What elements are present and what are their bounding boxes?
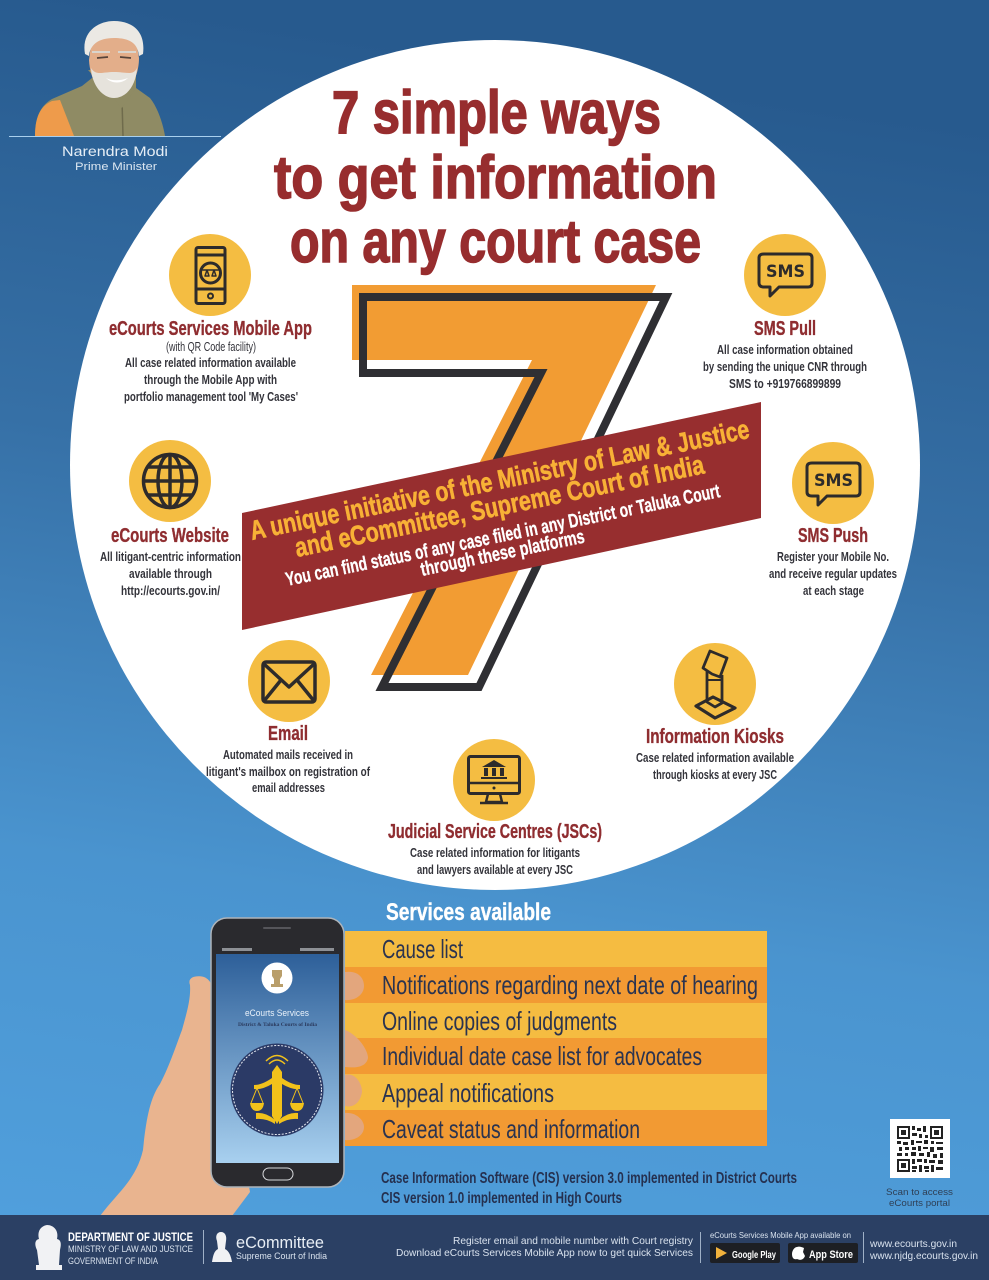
footer logo: Department of Justice: DEPARTMENT OF JUSTICE <box>68 1232 193 1244</box>
phone <box>211 918 344 1187</box>
footer message <box>396 1235 694 1259</box>
banner: through these platforms <box>419 526 587 581</box>
big numeral 7 <box>352 285 666 687</box>
panel: SMS Pull: SMS Pull <box>754 318 816 340</box>
icon: SMS bubble: SMS <box>814 471 853 491</box>
icon: Supreme Court emblem <box>212 1232 232 1262</box>
panel: eCourts Website: eCourts Website <box>111 525 229 547</box>
panel: eCourts Services Mobile App: through the Mobile App with <box>144 373 277 387</box>
phone: District & Taluka Courts of India <box>238 1022 317 1028</box>
banner: and eCommittee, Supreme Court of India <box>292 449 707 563</box>
panel: eCourts Services Mobile App: (with QR Code facility) <box>166 340 256 354</box>
panel: eCourts Website <box>100 440 241 598</box>
note: software versions: Case Information Software (CIS) version 3.0 implemented in District Courts <box>381 1170 797 1187</box>
title: 7 simple ways <box>332 79 661 146</box>
icon: kiosk <box>696 651 735 718</box>
footer URLs: www.njdg.ecourts.gov.in <box>869 1250 978 1262</box>
note: software versions <box>381 1170 797 1207</box>
panel: SMS Push: SMS Push <box>798 525 868 547</box>
panel: eCourts Services Mobile App <box>109 234 312 404</box>
panel: SMS Push: Register your Mobile No. <box>777 550 889 564</box>
title <box>274 79 717 275</box>
panel: Email <box>206 640 371 795</box>
icon: monitor with court building <box>468 756 520 803</box>
panel: SMS Pull: All case information obtained <box>717 343 853 357</box>
banner: A unique initiative of the Ministry of Law & Justice <box>247 414 752 546</box>
QR code <box>890 1119 950 1178</box>
panel: Information Kiosks <box>636 643 794 782</box>
panel: Email: Email <box>268 723 308 745</box>
portrait: Narendra Modi <box>35 21 165 136</box>
panel: SMS Pull <box>703 234 867 391</box>
panel: Judicial Service Centres: and lawyers available at every JSC <box>417 863 573 877</box>
badge: Google Play: Google Play <box>732 1250 776 1261</box>
footer band <box>0 1215 989 1280</box>
footer logo: Department of Justice: MINISTRY OF LAW AND JUSTICE <box>68 1244 193 1255</box>
services list <box>345 931 767 1146</box>
icon: SMS bubble: SMS <box>766 262 805 282</box>
portrait rule <box>9 136 221 137</box>
title: on any court case <box>290 208 701 275</box>
QR caption: eCourts portal <box>889 1198 950 1209</box>
panel: eCourts Services Mobile App: portfolio management tool 'My Cases' <box>124 390 298 404</box>
panel: Information Kiosks: through kiosks at every JSC <box>653 768 777 782</box>
panel: SMS Pull: by sending the unique CNR through <box>703 360 867 374</box>
panel: Email: Automated mails received in <box>223 748 353 762</box>
panel: Information Kiosks: Information Kiosks <box>646 726 784 748</box>
icon: SMS bubble <box>807 463 860 505</box>
icon: envelope <box>263 662 315 702</box>
footer message: Register email and mobile number with Court registry <box>453 1235 694 1247</box>
badge: App Store <box>788 1243 858 1263</box>
icon: globe <box>144 454 196 508</box>
panel: SMS Push: at each stage <box>803 584 864 598</box>
footer logo: eCommittee: eCommittee <box>236 1234 324 1252</box>
icon: national emblem <box>35 1225 62 1270</box>
phone: eCourts Services <box>245 1008 309 1018</box>
footer URLs: www.ecourts.gov.in <box>869 1238 957 1250</box>
panel: Email: litigant's mailbox on registration of <box>206 765 371 779</box>
footer logo: eCommittee <box>212 1232 328 1262</box>
footer logo: Department of Justice: GOVERNMENT OF INDIA <box>68 1256 159 1267</box>
QR caption: Scan to access <box>886 1187 953 1198</box>
name caption <box>62 144 168 173</box>
name caption: Prime Minister <box>75 161 157 173</box>
panel: Judicial Service Centres <box>388 739 602 877</box>
services list: Cause list <box>382 934 464 964</box>
services list: Online copies of judgments <box>382 1006 617 1036</box>
name caption: Narendra Modi <box>62 144 168 159</box>
banner: You can find status of any case filed in any District or Taluka Court <box>284 480 722 591</box>
note: software versions: CIS version 1.0 implemented in High Courts <box>381 1190 622 1207</box>
badge: Google Play <box>710 1243 780 1263</box>
heading: services available: Services available <box>386 899 551 926</box>
footer logo: Department of Justice <box>35 1225 193 1270</box>
services list: Notifications regarding next date of hearing <box>382 970 758 1000</box>
panel: eCourts Services Mobile App: eCourts Services Mobile App <box>109 318 312 340</box>
banner <box>242 402 761 630</box>
app emblem <box>230 1044 324 1136</box>
panel: Email: email addresses <box>252 781 325 795</box>
panel: eCourts Website: http://ecourts.gov.in/ <box>121 584 220 598</box>
hand holding phone <box>100 918 368 1216</box>
panel: Judicial Service Centres: Case related information for litigants <box>410 846 580 860</box>
panel: SMS Pull: SMS to +919766899899 <box>729 377 841 391</box>
footer message: Download eCourts Services Mobile App now to get quick Services <box>396 1247 693 1259</box>
panel: SMS Push: and receive regular updates <box>769 567 897 581</box>
fingers <box>345 972 368 1140</box>
icon: SMS bubble <box>759 254 812 296</box>
panel: Information Kiosks: Case related information available <box>636 751 794 765</box>
services list: Individual date case list for advocates <box>382 1041 702 1071</box>
app store badges <box>710 1231 858 1263</box>
footer URLs <box>869 1238 978 1262</box>
title: to get information <box>274 144 717 211</box>
panel: eCourts Website: available through <box>129 567 212 581</box>
panel: eCourts Services Mobile App: All case related information available <box>125 356 296 370</box>
panel: eCourts Website: All litigant-centric information <box>100 550 241 564</box>
footer logo: eCommittee: Supreme Court of India <box>236 1251 328 1262</box>
white circle panel <box>70 40 920 890</box>
badge: App Store: App Store <box>809 1249 853 1261</box>
app store badges: eCourts Services Mobile App available on <box>710 1231 851 1240</box>
services list: Appeal notifications <box>382 1078 554 1108</box>
icon: smartphone with scales <box>196 248 225 304</box>
panel: Judicial Service Centres: Judicial Service Centres (JSCs) <box>388 821 602 843</box>
panel: SMS Push <box>769 442 897 598</box>
services list: Caveat status and information <box>382 1114 640 1144</box>
QR caption <box>886 1187 953 1209</box>
